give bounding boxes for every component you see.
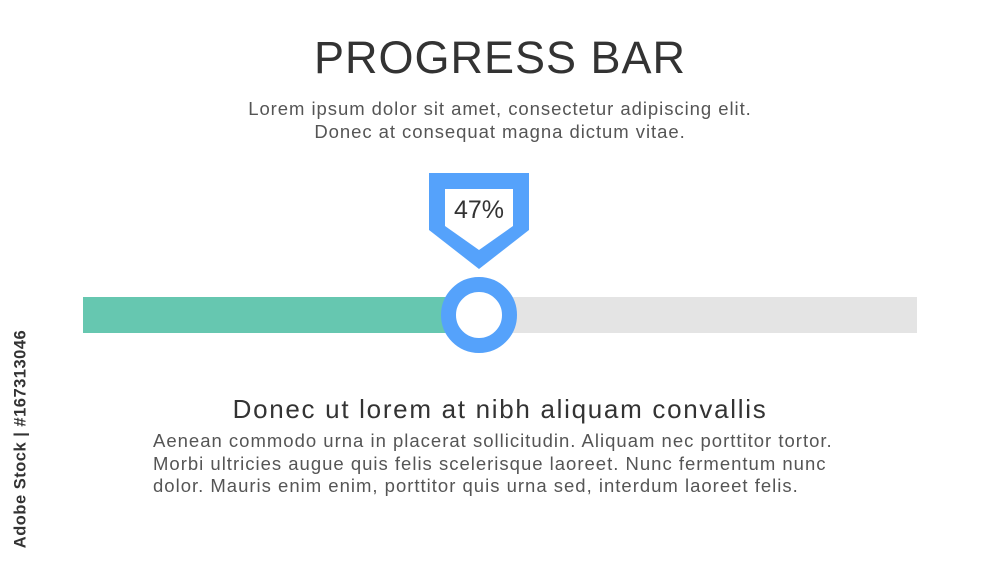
bar fill [83,297,479,333]
body heading: Donec ut lorem at nibh aliquam convallis [233,394,767,424]
subtitle: Lorem ipsum dolor sit amet, consectetur adipiscing elit. [248,98,752,119]
body text: Morbi ultricies augue quis felis scelerisque laoreet. Nunc fermentum nunc [153,452,827,474]
title: PROGRESS BAR [314,32,686,83]
percent label: 47% [454,196,504,224]
marker ring [448,284,510,346]
subtitle [248,98,752,142]
body text [153,430,833,496]
subtitle: Donec at consequat magna dictum vitae. [314,121,686,142]
bar track [83,297,917,333]
watermark credit: Adobe Stock | #167313046 [12,330,30,548]
body text: Aenean commodo urna in placerat sollicitudin. Aliquam nec porttitor tortor. [153,430,833,451]
body text: dolor. Mauris enim enim, porttitor quis urna sed, interdum laoreet felis. [153,475,799,496]
marker pentagon [429,173,529,269]
